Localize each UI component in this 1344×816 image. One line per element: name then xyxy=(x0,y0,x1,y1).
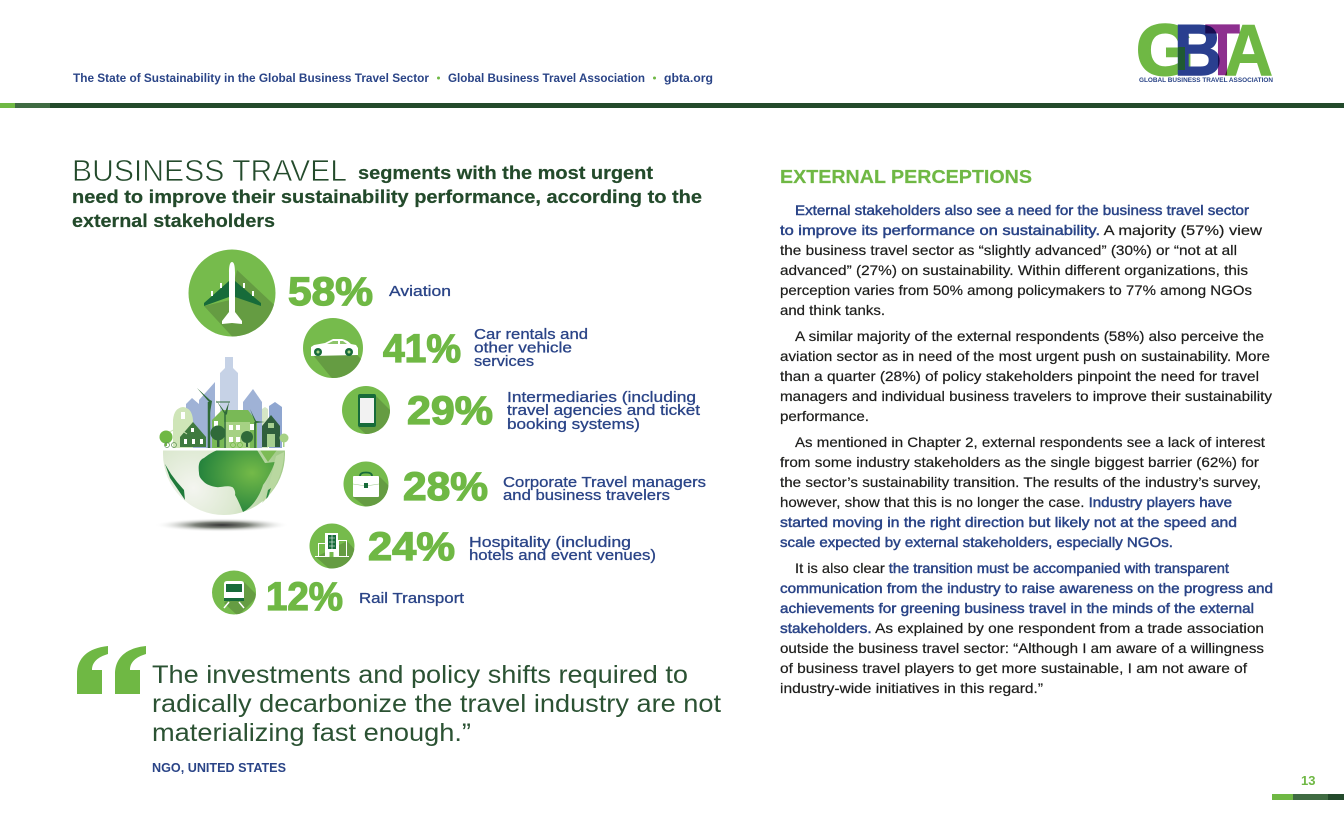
stat: hospitality: Hospitality (including xyxy=(469,534,631,551)
pull quote: The investments and policy shifts required to xyxy=(152,661,688,689)
chart heading: need to improve their sustainability performance, according to the xyxy=(72,186,702,207)
quote attribution: NGO, UNITED STATES xyxy=(152,761,286,775)
pull quote xyxy=(152,661,721,747)
body paragraph 2: A similar majority of the external respondents (58%) also perceive the xyxy=(795,329,1264,344)
body paragraph 3: the sector’s sustainability transition. The results of the industry’s survey, xyxy=(780,475,1261,490)
body paragraph 4: achievements for greening business travel in the minds of the external xyxy=(780,601,1254,616)
stat: hospitality: hotels and event venues) xyxy=(469,547,656,564)
stat: car rentals: other vehicle xyxy=(474,340,572,356)
body paragraph 4: communication from the industry to raise awareness on the progress and xyxy=(780,581,1273,596)
body paragraph 4 xyxy=(780,561,1273,696)
footer bar xyxy=(1272,794,1344,800)
stat: corporate travel: Corporate Travel managers xyxy=(503,474,706,491)
body paragraph 4: industry-wide initiatives in this regard.” xyxy=(780,681,1043,696)
body paragraph 4: of business travel players to get more sustainable, I am not aware of xyxy=(780,661,1247,676)
header tagline: gbta.org xyxy=(664,73,713,85)
body paragraph 4: outside the business travel sector: “Although I am aware of a willingness xyxy=(780,641,1264,656)
stat: rail: Rail Transport xyxy=(359,590,465,607)
stat: aviation: Aviation xyxy=(389,283,451,300)
header tagline: The State of Sustainability in the Global Business Travel Sector xyxy=(73,73,430,85)
stat: rail: 12% xyxy=(266,575,343,619)
body paragraph 2: managers and individual business travelers to improve their sustainability xyxy=(780,389,1272,404)
body paragraph 1: perception varies from 50% among policymakers to 77% among NGOs xyxy=(780,283,1252,298)
body paragraph 3: scale expected by external stakeholders, especially NGOs. xyxy=(780,535,1173,550)
body paragraph 3 xyxy=(780,435,1265,550)
chart heading: segments with the most urgent xyxy=(358,162,653,183)
stat: intermediaries xyxy=(407,389,701,433)
stat: intermediaries: Intermediaries (including xyxy=(507,389,696,406)
body paragraph 2 xyxy=(780,329,1272,424)
globe shadow xyxy=(154,518,290,532)
stat: car rentals: 41% xyxy=(383,327,461,371)
body paragraph 1: to improve its performance on sustainability. A majority (57%) view xyxy=(780,223,1262,238)
body paragraph 4: stakeholders. As explained by one respondent from a trade association xyxy=(780,621,1264,636)
icon: phone xyxy=(342,386,390,434)
chart heading: external stakeholders xyxy=(72,210,275,231)
illustration: green city on globe xyxy=(154,357,290,532)
stat: hospitality xyxy=(368,525,656,569)
body paragraph 3: however, show that this is no longer the case. Industry players have xyxy=(780,495,1232,510)
stat: corporate travel: and business travelers xyxy=(503,487,670,504)
icon: hospitality xyxy=(310,524,354,568)
body paragraph 1: advanced” (27%) on sustainability. Within different organizations, this xyxy=(780,263,1248,278)
stat: corporate travel: 28% xyxy=(403,465,488,509)
body paragraph 2: performance. xyxy=(780,409,869,424)
section heading: EXTERNAL PERCEPTIONS xyxy=(780,166,1032,187)
body paragraph 2: aviation sector as in need of the most urgent push on sustainability. More xyxy=(780,349,1270,364)
body paragraph 1: and think tanks. xyxy=(780,303,885,318)
body paragraph 2: than a quarter (28%) of policy stakeholders pinpoint the need for travel xyxy=(780,369,1259,384)
icon: airplane xyxy=(188,250,276,336)
body paragraph 3: As mentioned in Chapter 2, external respondents see a lack of interest xyxy=(795,435,1265,450)
body paragraph 3: from some industry stakeholders as the single biggest barrier (62%) for xyxy=(780,455,1259,470)
body paragraph 1: External stakeholders also see a need for the business travel sector xyxy=(795,203,1249,218)
body paragraph 4: It is also clear the transition must be accompanied with transparent xyxy=(795,561,1229,576)
logo: GBTA: A xyxy=(1224,11,1273,91)
stat: car rentals: Car rentals and xyxy=(474,326,588,343)
logo: GBTA: G xyxy=(1136,11,1194,91)
pull quote: radically decarbonize the travel industry are not xyxy=(152,690,721,718)
logo: GBTA xyxy=(1136,11,1273,91)
stat: corporate travel xyxy=(403,465,706,509)
body paragraph 1 xyxy=(780,203,1262,318)
icon: briefcase xyxy=(344,462,388,506)
pull quote: materializing fast enough.” xyxy=(152,719,471,747)
stat: car rentals xyxy=(383,326,588,371)
body paragraph 3: started moving in the right direction but likely not at the speed and xyxy=(780,515,1237,530)
stat: car rentals: services xyxy=(474,353,534,370)
city skyline xyxy=(160,357,288,448)
icon: car xyxy=(303,318,363,378)
stat: intermediaries: 29% xyxy=(407,389,493,433)
stat: aviation: 58% xyxy=(288,270,373,314)
header tagline: Global Business Travel Association xyxy=(448,73,645,85)
header bar xyxy=(0,103,1344,108)
logo: GBTA: B xyxy=(1174,11,1222,91)
globe xyxy=(163,450,285,515)
logo: GBTA: T xyxy=(1205,11,1240,91)
chart heading xyxy=(72,153,702,231)
icon: train xyxy=(212,570,258,616)
stat: rail xyxy=(266,575,465,619)
stat: intermediaries: travel agencies and ticket xyxy=(507,402,701,419)
body paragraph 1: the business travel sector as “slightly advanced” (30%) or “not at all xyxy=(780,243,1237,258)
icon: quotation mark xyxy=(77,646,146,694)
stat: aviation xyxy=(288,270,451,314)
stat: hospitality: 24% xyxy=(368,525,455,569)
stat: intermediaries: booking systems) xyxy=(507,416,640,433)
logo: GBTA: GLOBAL BUSINESS TRAVEL ASSOCIATION xyxy=(1139,77,1273,84)
chart heading: BUSINESS TRAVEL xyxy=(72,153,347,188)
page number: 13 xyxy=(1301,773,1315,788)
header tagline xyxy=(73,73,713,85)
